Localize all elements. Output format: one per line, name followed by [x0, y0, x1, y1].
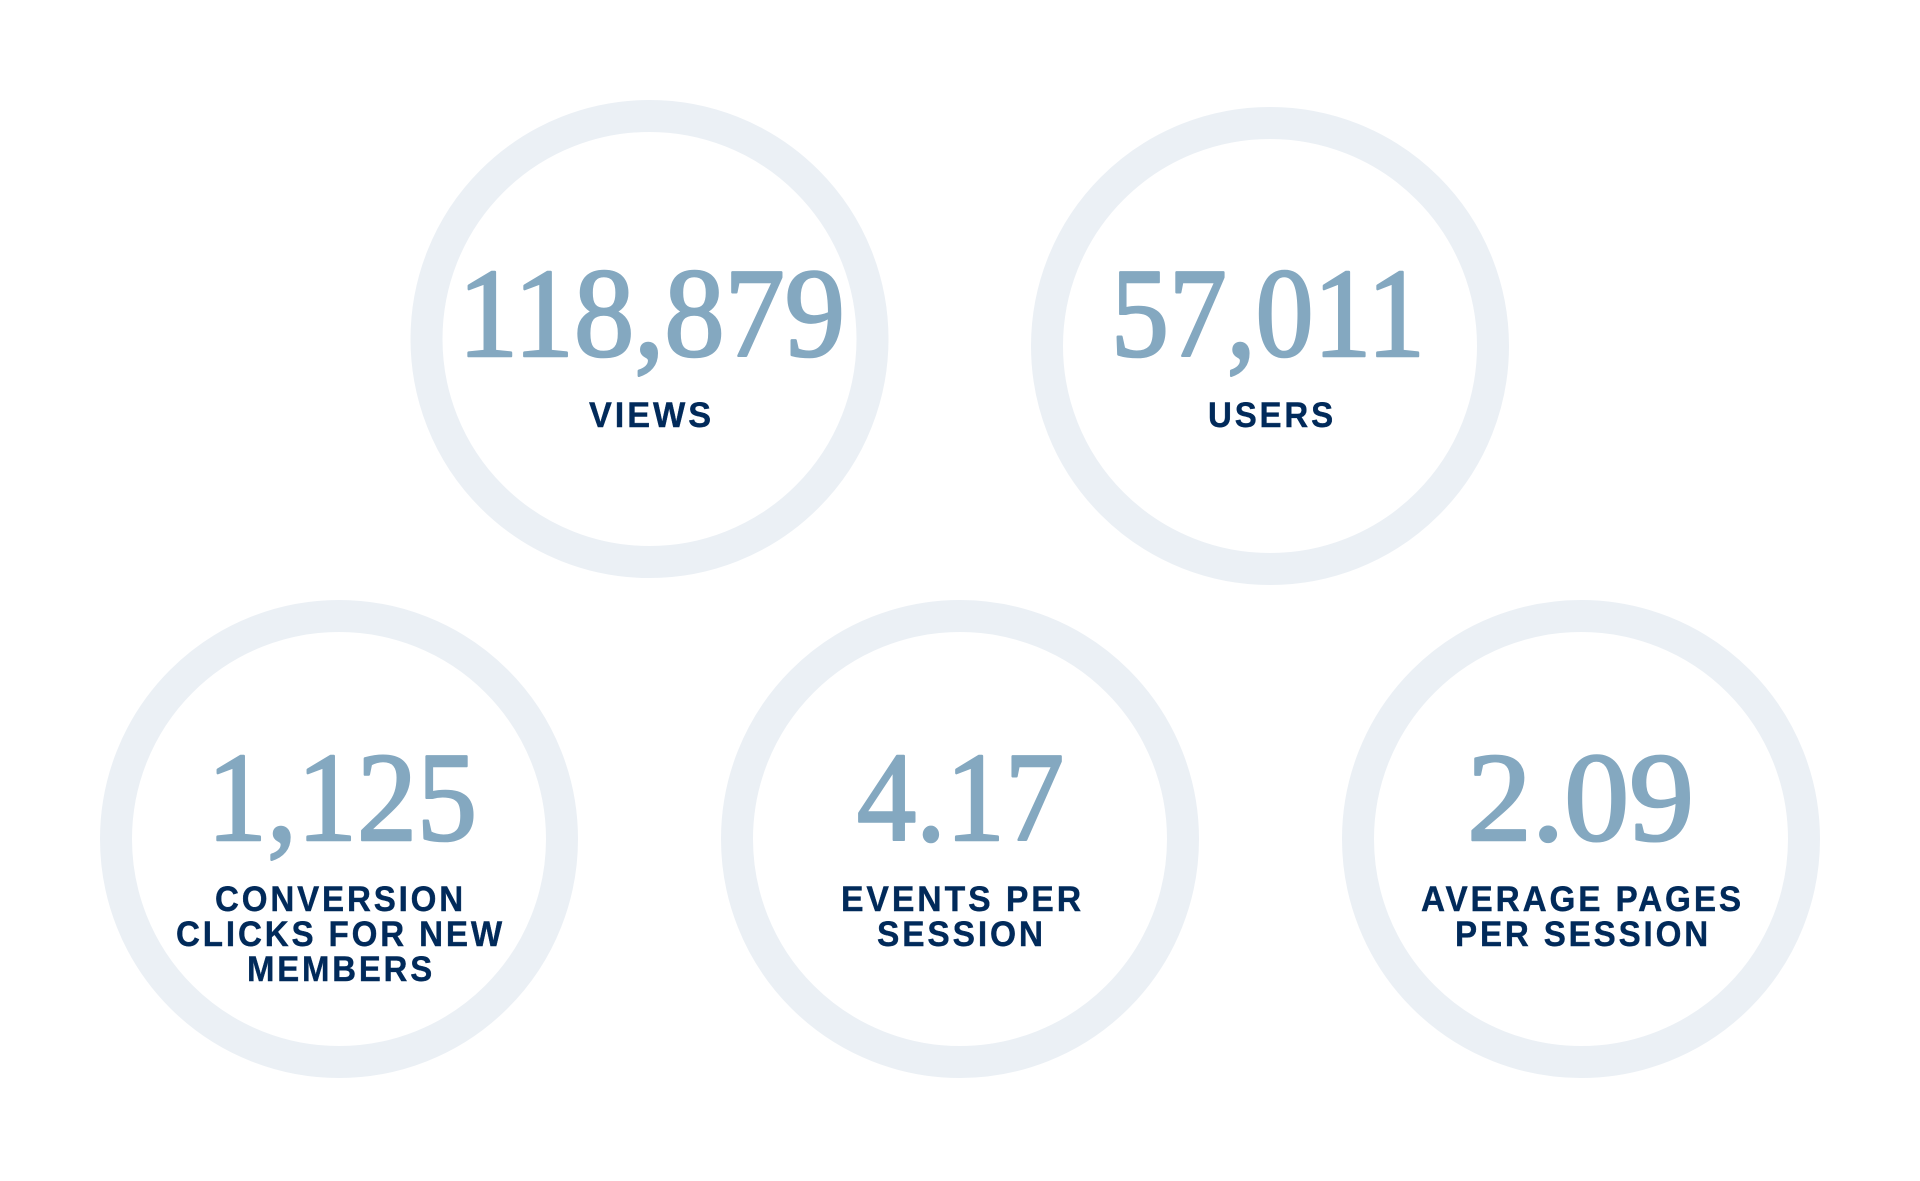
ring: conversion clicks: [116, 616, 562, 1062]
ring: average pages per session: [1358, 616, 1804, 1062]
label: conversion clicks for new members: MEMBERS: [247, 950, 435, 989]
number: events per session: 4.17: [857, 728, 1064, 868]
label: average pages per session: AVERAGE PAGES: [1421, 880, 1744, 919]
label: views: VIEWS: [589, 396, 714, 435]
panel: average pages per session stat: [1358, 616, 1804, 1062]
label: events per session: [841, 880, 1084, 954]
number: conversion clicks: 1,125: [207, 728, 477, 868]
ring: events per session: [737, 616, 1183, 1062]
label: conversion clicks for new members: [176, 880, 505, 989]
panel: conversion clicks stat: [116, 616, 562, 1062]
label: events per session: SESSION: [877, 915, 1046, 954]
label: average pages per session: [1421, 880, 1744, 954]
panel: views stat: [426, 116, 872, 562]
label: average pages per session: PER SESSION: [1455, 915, 1711, 954]
ring: users: [1047, 123, 1493, 569]
label: conversion clicks for new members: CLICKS FOR NEW: [176, 915, 505, 954]
label: conversion clicks for new members: CONVERSION: [215, 880, 466, 919]
panel: users stat: [1047, 123, 1493, 569]
label: events per session: EVENTS PER: [841, 880, 1084, 919]
panel: events per session stat: [737, 616, 1183, 1062]
number: views: 118,879: [458, 244, 845, 384]
ring: views: [426, 116, 872, 562]
number: average pages per session: 2.09: [1467, 728, 1694, 868]
label: users: USERS: [1208, 396, 1336, 435]
number: users: 57,011: [1111, 244, 1425, 384]
